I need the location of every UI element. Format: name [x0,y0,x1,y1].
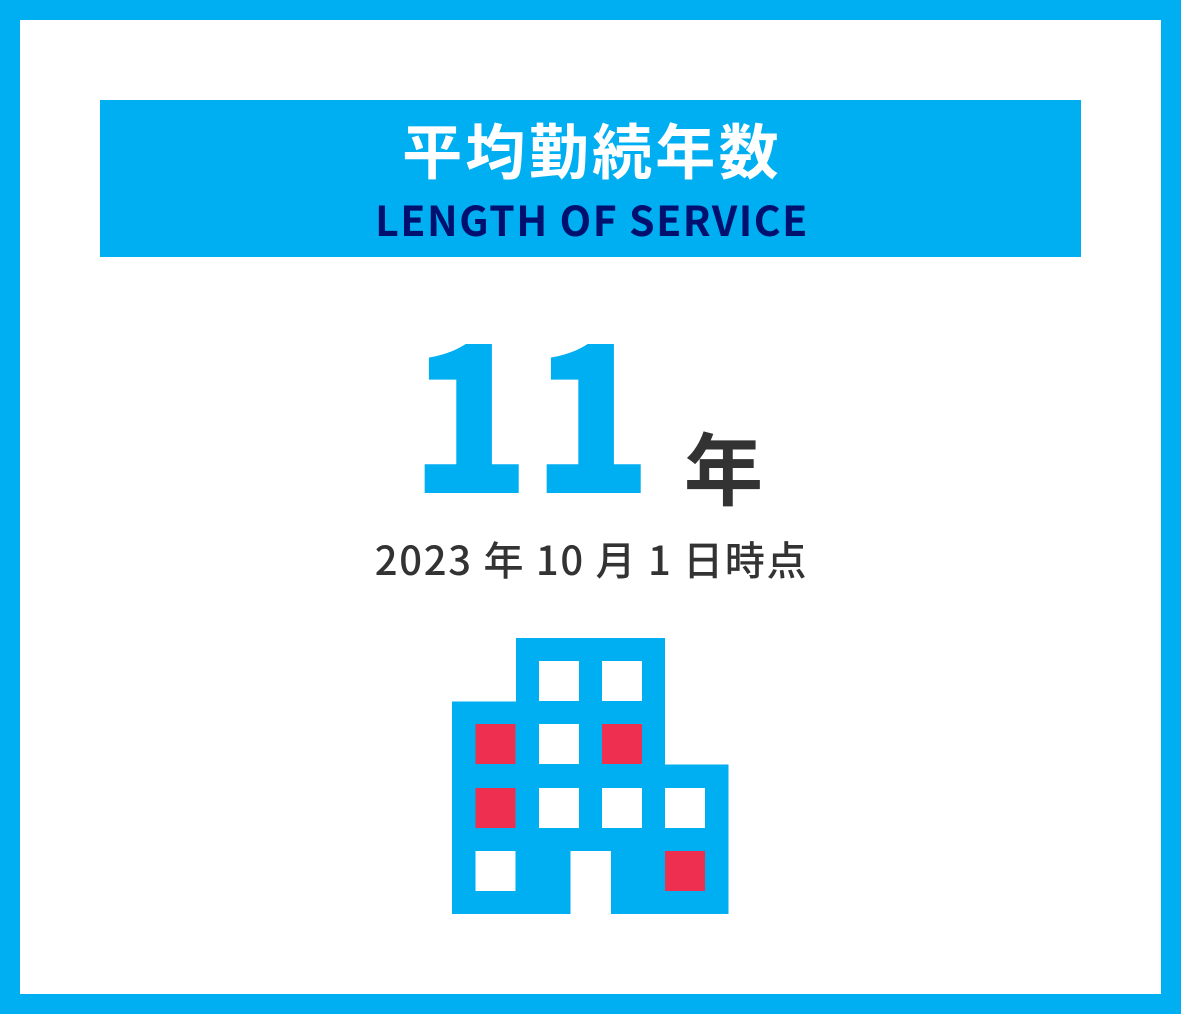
date note: 2023 年 10 月 1 日時点 [375,529,808,587]
heading banner [100,100,1081,257]
big number: 11 years [409,300,763,522]
icon: office building [452,638,728,914]
title: Japanese: 平均勤続年数 [402,105,782,192]
subtitle: English: LENGTH OF SERVICE [375,188,809,248]
unit 年: 年 [684,407,763,522]
